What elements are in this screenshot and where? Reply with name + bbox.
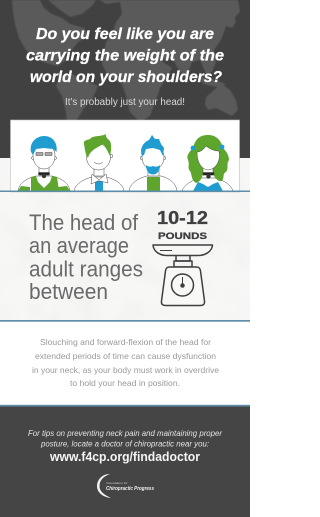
website url: www.f4cp.org/findadoctor xyxy=(49,450,200,464)
panel: footer xyxy=(0,406,250,517)
logo: Foundation for Chiropractic Progress xyxy=(97,474,154,498)
panel: four people illustration xyxy=(10,120,240,192)
logo: Foundation for Chiropractic Progress: Foundation for xyxy=(106,481,128,485)
panel: explanation text xyxy=(0,322,250,405)
infographic canvas xyxy=(0,0,250,517)
call to action text: posture, locate a doctor of chiropractic near you: xyxy=(40,440,209,448)
statement text: The head of xyxy=(29,210,139,235)
subheading: It's probably just your head! xyxy=(65,97,185,108)
stat: 10-12 pounds: 10-12 xyxy=(157,208,208,228)
panel: explanation text: in your neck, as your body must work in overdrive xyxy=(32,366,219,375)
figure: blue hair woman with glasses xyxy=(18,136,70,191)
call to action text: For tips on preventing neck pain and maintaining proper xyxy=(28,429,222,438)
divider line above body text xyxy=(0,320,250,322)
heading xyxy=(26,26,224,86)
panel: marble background xyxy=(0,158,250,320)
stat: 10-12 pounds: POUNDS xyxy=(158,231,207,242)
icon: kitchen scale xyxy=(153,245,212,306)
world map xyxy=(12,0,240,132)
statement text: between xyxy=(29,279,108,304)
figure: blue hair man with beard xyxy=(129,135,177,191)
heading: Do you feel like you are xyxy=(36,26,214,43)
panel: explanation text: to hold your head in position. xyxy=(70,379,180,388)
stat: 10-12 pounds xyxy=(157,208,208,242)
heading: carrying the weight of the xyxy=(26,48,224,64)
panel: explanation text: Slouching and forward-flexion of the head for xyxy=(40,338,211,347)
call to action text xyxy=(28,429,222,448)
logo: Foundation for Chiropractic Progress: Chiropractic Progress xyxy=(106,486,154,492)
statement text: adult ranges xyxy=(29,256,143,282)
figure: green hair man xyxy=(74,134,124,191)
panel: explanation text: extended periods of time can cause dysfunction xyxy=(35,352,216,361)
divider line under people xyxy=(0,190,250,192)
statement text xyxy=(29,210,143,304)
divider line above footer xyxy=(0,405,250,406)
figure: green curly hair woman xyxy=(182,135,233,191)
panel: world map header xyxy=(0,0,250,158)
heading: world on your shoulders? xyxy=(30,69,222,86)
statement text: an average xyxy=(29,233,129,258)
